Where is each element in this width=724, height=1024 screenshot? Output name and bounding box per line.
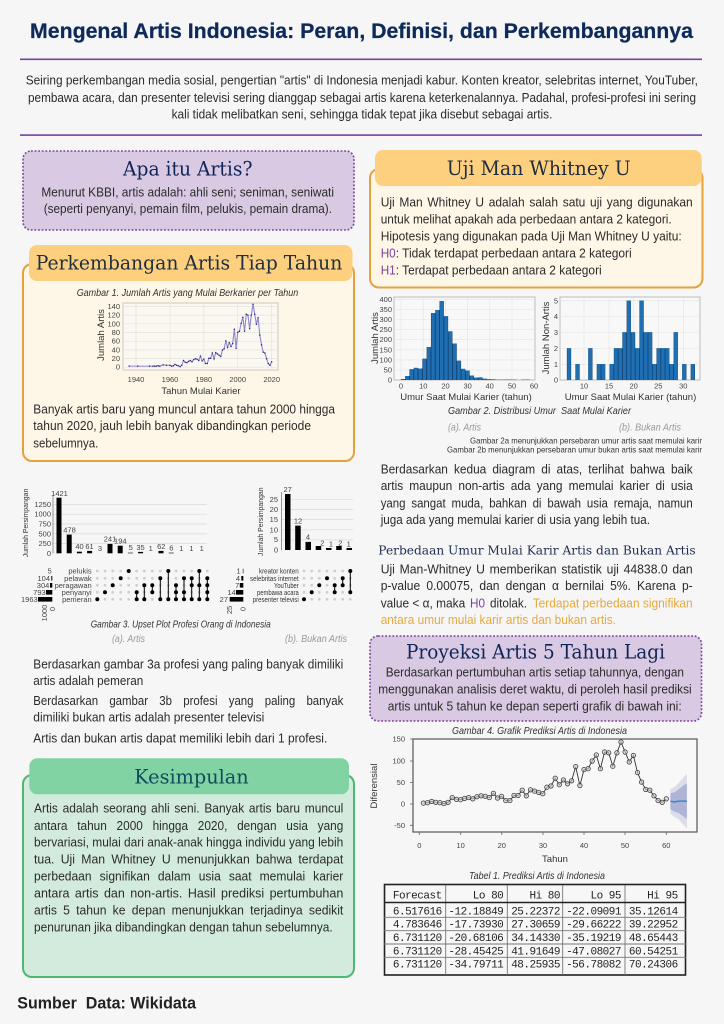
text: interpretasi diagram: yang sangat muda, bahkan di bawah usia remaja, namun (381, 495, 693, 510)
histogram a: umur artis: 150 (379, 345, 392, 354)
upset plot a: artis: 1 (200, 544, 204, 553)
upset plot b: bukan artis: kreator konten (259, 568, 299, 576)
table header: Lo 95 (590, 891, 621, 903)
text: profesi: Artis dan bukan artis dapat memiliki lebih dari 1 profesi. (33, 730, 327, 745)
set size bars: 304 (37, 581, 49, 590)
table: prediksi artis (384, 884, 686, 975)
histogram a: umur artis: 30 (464, 382, 472, 390)
upset plot a: artis: 194 (114, 536, 127, 546)
text: perkembangan: tahun 2020, jauh lebih banyak dibandingkan periode (33, 418, 311, 433)
histogram a: umur artis: 100 (379, 355, 392, 364)
set size bars: 0 (48, 607, 57, 611)
text: profesi: artis adalah pemeran (33, 673, 143, 688)
text: hasil uji: p-value 0.00075, dan dengan α bernilai 5%. Karena p- (381, 578, 693, 593)
upset plot b: bukan artis (220, 485, 353, 614)
line chart: jumlah artis per tahun: 120 (107, 311, 120, 320)
upset plot b: bukan artis: Jumlah Persimpangan (258, 487, 265, 556)
upset plot a: artis: 1250 (34, 500, 51, 509)
text: hipotesis: H1 (381, 262, 396, 277)
table rows: 35.12614 (629, 906, 679, 918)
table rows: 70.24306 (629, 960, 678, 972)
table rows: 6.517616 (393, 906, 442, 918)
intersection bars (56, 498, 174, 553)
forecast chart: 50 (397, 778, 405, 787)
table rows: 60.54251 (629, 946, 679, 958)
table rows: 4.783646 (393, 920, 442, 932)
histogram b: umur bukan artis: 1 (554, 360, 558, 369)
upset plot a: artis: 250 (38, 539, 51, 548)
upset plot a: artis: 478 (63, 526, 76, 534)
upset plot b: bukan artis: 25 (270, 495, 278, 504)
upset plot a: artis: 62 (157, 542, 165, 551)
text: hasil uji (381, 561, 693, 627)
forecast chart (369, 734, 697, 865)
sub caption: b bukan artis: (b). Bukan Artis (619, 422, 682, 434)
text: kesimpulan: tua. Uji Man Whitney U menunjukkan bahwa terdapat (34, 851, 344, 866)
upset plot b: bukan artis: 4 (306, 532, 310, 541)
text: kesimpulan: penurunan jika dibandingkan dengan tahun sebelumnya. (34, 920, 333, 935)
table rows: -20.68106 (448, 933, 503, 945)
line chart: jumlah artis per tahun (96, 302, 280, 397)
upset plot b: bukan artis: 0 (274, 545, 278, 554)
upset plot a: artis: peragawan (55, 581, 92, 590)
text: hipotesis: H0 (381, 245, 396, 260)
line chart: jumlah artis per tahun: 2020 (263, 375, 280, 384)
caption: gambar 4: Gambar 4. Grafik Prediksi Artis di Indonesia (452, 726, 627, 737)
text: kesimpulan: antara tahun 2000 hingga 2020, dengan usia yang (34, 818, 343, 833)
text: hipotesis: Uji Man Whitney U adalah salah satu uji yang digunakan (381, 195, 693, 210)
intro text (26, 72, 698, 122)
upset plot a: artis: 1 (149, 544, 153, 553)
text: kesimpulan: perbedaan signifikan dalam usia saat memulai karier (34, 869, 344, 884)
upset plot a: artis: 1421 (51, 489, 68, 498)
upset plot b: bukan artis: 1 (347, 540, 351, 549)
text: hasil uji: H0 (470, 595, 485, 610)
heading: proyeksi: Proyeksi Artis 5 Tahun Lagi (406, 640, 665, 663)
table rows: -56.78082 (566, 960, 621, 972)
title: Mengenal Artis Indonesia: Peran, Definisi, dan Perkembangannya (30, 19, 694, 43)
data markers (421, 740, 668, 806)
text: interpretasi diagram: artis maupun non-artis ada yang memulai karier di usia (381, 478, 694, 493)
upset plot a: artis: 0 (47, 549, 51, 558)
upset plot a: artis: Jumlah Persimpangan (23, 489, 30, 557)
forecast chart: 50 (621, 841, 629, 850)
upset plot a: artis: 40 (75, 542, 84, 551)
line chart: jumlah artis per tahun: 1940 (128, 375, 144, 384)
forecast chart: 0 (401, 800, 405, 808)
line chart: jumlah artis per tahun: Tahun Mulai Karier (161, 386, 241, 397)
upset plot b: bukan artis: presenter televisi (253, 597, 299, 604)
text: interpretasi diagram: Berdasarkan kedua diagram di atas, terlihat bahwa baik (381, 461, 693, 476)
text: hasil uji: Terdapat perbedaan signifikan (533, 595, 693, 610)
upset plot b: bukan artis: 1 (329, 540, 333, 549)
text: proyeksi: artis untuk 5 tahun ke depan seperti grafik di bawah ini: (388, 699, 682, 714)
set size bars (21, 566, 57, 621)
text: profesi: Berdasarkan gambar 3b profesi yang paling banyak (33, 693, 344, 708)
text: kesimpulan: artis 5 tahun ke depan menunjukkan terjadinya sedikit (34, 902, 344, 917)
table rows: 48.65443 (629, 933, 678, 945)
text: proyeksi (378, 665, 692, 714)
source note: Sumber Data: Wikidata (17, 993, 197, 1012)
upset plot b: bukan artis: 2 (338, 538, 342, 547)
table rows: -22.09091 (566, 906, 622, 918)
table header: Hi 80 (529, 891, 560, 903)
histogram a: umur artis: 40 (486, 382, 494, 390)
text: kesimpulan: bervariasi, mulai dari anak-anak hingga individu yang lebih (34, 835, 343, 850)
histogram a: umur artis: 20 (441, 382, 450, 390)
set size bars: 5 (48, 566, 52, 576)
histogram a: umur artis: 0 (399, 382, 403, 390)
upset plot b: bukan artis: 2 (320, 538, 324, 547)
forecast chart: 20 (498, 841, 506, 850)
upset plot a: artis: 1 (179, 544, 183, 553)
set size bars: 7 (235, 581, 239, 590)
upset plot b: bukan artis: 10 (270, 525, 278, 534)
histogram a: umur artis: 400 (379, 295, 392, 304)
note: gambar 2: Gambar 2b menunjukkan persebaran umur bukan artis saat memulai karir (447, 446, 702, 454)
upset plot a: artis (21, 489, 207, 621)
line chart: jumlah artis per tahun: Jumlah Artis (96, 309, 107, 361)
set size bars: 793 (33, 588, 46, 597)
text: perkembangan: sebelumnya. (33, 435, 98, 450)
set size bars: 27 (220, 595, 228, 604)
upset plot a: artis: pemeran (62, 595, 92, 604)
text: hipotesis (381, 195, 693, 277)
heading: uji man whitney: Uji Man Whitney U (447, 157, 631, 180)
histogram b: umur bukan artis (541, 296, 700, 403)
histogram b: umur bukan artis: 15 (605, 382, 613, 390)
text: hipotesis: untuk melihat apakah ada perbedaan antara 2 kategori. (381, 211, 672, 226)
upset plot b: bukan artis: YouTuber (274, 583, 299, 590)
forecast chart: 60 (662, 841, 670, 850)
panel: perkembangan artis tiap tahun (23, 245, 354, 461)
text: interpretasi diagram: juga ada yang memulai karier di usia yang lebih tua. (380, 512, 650, 527)
text: kesimpulan: Artis adalah seorang ahli seni. Banyak artis baru muncul (34, 801, 343, 816)
upset plot b: bukan artis: pembawa acara (257, 590, 299, 597)
set size bars: 1000 (40, 605, 49, 621)
forecast chart: 10 (457, 841, 465, 850)
upset plot a: artis: 6 (169, 544, 173, 552)
set size bars: 104 (37, 574, 50, 583)
table rows: 6.731120 (393, 946, 442, 958)
histogram a: umur artis: 350 (379, 305, 392, 314)
histogram b: umur bukan artis: Jumlah Non-Artis (541, 301, 552, 374)
table header: Lo 80 (473, 891, 503, 903)
caption: gambar 1: Gambar 1. Jumlah Artis yang Mulai Berkarier per Tahun (77, 288, 299, 299)
upset plot b: bukan artis: 12 (294, 516, 302, 525)
upset plot a: artis: 241 (104, 534, 116, 544)
upset plot a: artis: 5 (129, 543, 133, 552)
text: hasil uji: Uji Man-Whitney U memberikan statistik uji 44838.0 dan (381, 561, 693, 576)
forecast interval (670, 774, 687, 828)
table rows: -29.66222 (566, 920, 621, 932)
table rows (393, 906, 679, 972)
text: perkembangan: Banyak artis baru yang muncul antara tahun 2000 hingga (33, 401, 336, 416)
table rows: -12.18849 (448, 906, 503, 918)
table rows: -35.19219 (566, 933, 621, 945)
upset plot a: artis: 750 (38, 520, 51, 528)
text: kesimpulan (34, 801, 344, 935)
text: interpretasi diagram (380, 461, 694, 527)
histogram a: umur artis: Umur Saat Mulai Karier (tahun) (400, 392, 532, 403)
histogram a: umur artis: 10 (419, 382, 427, 390)
line chart: jumlah artis per tahun: 100 (107, 319, 120, 328)
table rows: -47.08027 (566, 946, 621, 958)
upset plot a: artis: pelukis (68, 566, 92, 576)
heading: apa itu artis: Apa itu Artis? (122, 158, 252, 181)
caption: tabel 1: Tabel 1. Prediksi Artis di Indonesia (469, 871, 605, 882)
histogram b: umur bukan artis: Umur Saat Mulai Karier (tahun) (565, 392, 696, 403)
set size bars: 14 (227, 588, 236, 597)
text: hipotesis: Hipotesis yang digunakan pada Uji Man Whitney U yaitu: (381, 229, 682, 244)
table rows: -17.73930 (448, 920, 503, 932)
note: gambar 2: Gambar 2a menunjukkan persebaran umur artis saat memulai karir (470, 436, 702, 446)
table rows: 6.731120 (393, 933, 442, 945)
histogram a: umur artis: 50 (508, 382, 516, 390)
forecast chart: 0 (417, 841, 421, 850)
sub caption: a artis: (a). Artis (448, 422, 482, 434)
text: proyeksi: Berdasarkan pertumbuhan artis setiap tahunnya, dengan (386, 665, 684, 680)
caption: gambar 3: Gambar 3. Upset Plot Profesi Orang di Indonesia (91, 620, 271, 630)
text: profesi (33, 656, 344, 745)
intersection bars (285, 494, 352, 550)
table rows: 34.14330 (511, 933, 560, 945)
upset plot a: artis: 1000 (34, 510, 51, 519)
upset plot a: artis: pelawak (64, 574, 92, 583)
histogram b: umur bukan artis: 20 (630, 382, 638, 390)
line chart: jumlah artis per tahun: 0 (116, 363, 120, 372)
set size bars: 0 (238, 607, 248, 611)
table rows: 25.22372 (511, 906, 560, 918)
definition text: (seperti penyanyi, pemain film, pelukis, pemain drama). (44, 201, 332, 216)
histogram b: umur bukan artis: 3 (554, 328, 558, 337)
panel: proyeksi artis (370, 636, 702, 721)
upset plot a: artis: 1 (189, 544, 193, 553)
histogram b: umur bukan artis: 30 (679, 382, 687, 390)
set size bars: 25 (225, 606, 234, 614)
forecast chart: 30 (539, 841, 547, 850)
table rows: 39.22952 (629, 920, 678, 932)
set size bars: 1 (237, 566, 241, 576)
upset plot a: artis: 3 (98, 544, 102, 553)
table rows: -28.45425 (448, 946, 503, 958)
set size bars: 1963 (21, 595, 38, 604)
table rows: -34.79711 (448, 960, 504, 972)
sub caption: b bukan artis: (b). Bukan Artis (285, 633, 348, 645)
note: gambar 2 (447, 436, 702, 454)
forecast chart: Tahun (542, 854, 568, 865)
text: hasil uji: ditolak. (490, 595, 527, 610)
heading: perbedaan umur: Perbedaan Umur Mulai Karir Artis dan Bukan Artis (378, 542, 696, 557)
line chart: jumlah artis per tahun: 2000 (229, 375, 246, 384)
table rows: 48.25935 (511, 960, 560, 972)
line chart: jumlah artis per tahun: 40 (112, 345, 120, 354)
text: profesi: dimiliki bukan artis adalah presenter televisi (33, 710, 264, 725)
text: hasil uji: value < α, maka (381, 595, 466, 610)
histogram b: umur bukan artis: 2 (554, 344, 558, 353)
histogram a: umur artis: 60 (530, 382, 538, 390)
panel: uji man whitney u (370, 150, 702, 288)
text: perkembangan (33, 401, 336, 450)
histogram a: umur artis: Jumlah Artis (370, 312, 381, 364)
histogram b: umur bukan artis: 4 (554, 312, 558, 321)
forecast chart: 100 (392, 756, 405, 766)
table rows: 6.731120 (393, 960, 442, 972)
intro text: kali tidak melibatkan seni, sehingga tidak tepat jika disebut sebagai artis. (172, 106, 552, 122)
forecast chart: Diferensial (369, 764, 380, 808)
panel: apa itu artis (23, 151, 354, 230)
heading: perkembangan: Perkembangan Artis Tiap Tahun (36, 251, 343, 274)
definition text: Menurut KBBI, artis adalah: ahli seni; seniman, seniwati (41, 185, 334, 200)
histogram a: umur artis: 0 (388, 376, 392, 385)
upset plot a: artis: 35 (136, 543, 145, 552)
line chart: jumlah artis per tahun: 1960 (162, 375, 178, 384)
panel: kesimpulan (23, 758, 354, 977)
histogram a: umur artis (370, 295, 538, 403)
histogram a: umur artis: 300 (379, 315, 392, 324)
histogram a: umur artis: 250 (379, 325, 392, 334)
set size bars: 4 (236, 574, 240, 583)
table rows: 27.30659 (511, 920, 560, 932)
histogram b: umur bukan artis: 25 (654, 382, 662, 390)
dot matrix (304, 571, 350, 599)
upset plot b: bukan artis: 20 (270, 505, 278, 514)
text: kesimpulan: antara artis dan non-artis. Hasil prediksi pertumbuhan (34, 886, 343, 901)
histogram a: umur artis: 50 (384, 366, 392, 374)
line chart: jumlah artis per tahun: 140 (107, 302, 120, 311)
upset plot a: artis: penyanyi (62, 588, 92, 597)
line chart: jumlah artis per tahun: 60 (112, 337, 120, 346)
histogram b: umur bukan artis: 0 (554, 376, 558, 385)
line chart: jumlah artis per tahun: 80 (112, 328, 120, 337)
text: proyeksi: menggunakan analisis deret waktu, di peroleh hasil prediksi (378, 681, 692, 696)
text: hasil uji: antara umur mulai karir artis dan bukan artis. (381, 612, 616, 627)
table rows: 41.91649 (511, 946, 560, 958)
text: hipotesis: : Terdapat perbedaan antara 2 kategori (396, 262, 602, 277)
upset plot b: bukan artis: 15 (270, 515, 278, 524)
dot matrix (97, 571, 207, 599)
histogram a: umur artis: 200 (379, 335, 392, 344)
upset plot b: bukan artis: 5 (274, 535, 278, 544)
text: profesi: Berdasarkan gambar 3a profesi yang paling banyak dimiliki (33, 656, 343, 671)
table header (393, 891, 678, 903)
upset plot b: bukan artis: 27 (284, 485, 292, 494)
line chart: jumlah artis per tahun: 1980 (195, 375, 212, 384)
upset plot b: bukan artis: selebritas internet (250, 576, 299, 583)
sub caption: a artis: (a). Artis (112, 633, 146, 645)
caption: gambar 2: Gambar 2. Distribusi Umur Saat Mulai Karier (448, 406, 631, 417)
set size bars (220, 566, 248, 614)
forecast chart: -50 (394, 821, 405, 830)
forecast chart: 40 (580, 841, 588, 850)
heading: kesimpulan: Kesimpulan (134, 765, 249, 788)
text: hipotesis: : Tidak terdapat perbedaan antara 2 kategori (396, 245, 632, 260)
histogram b: umur bukan artis: 5 (554, 296, 558, 305)
forecast chart: 150 (392, 734, 405, 744)
upset plot a: artis: 61 (85, 542, 94, 551)
line chart: jumlah artis per tahun: 20 (112, 354, 120, 363)
histogram b: umur bukan artis: 10 (580, 382, 588, 390)
table header: Hi 95 (647, 891, 678, 903)
table header: Forecast (393, 891, 442, 903)
upset plot a: artis: 500 (38, 529, 51, 538)
definition text (41, 185, 334, 216)
